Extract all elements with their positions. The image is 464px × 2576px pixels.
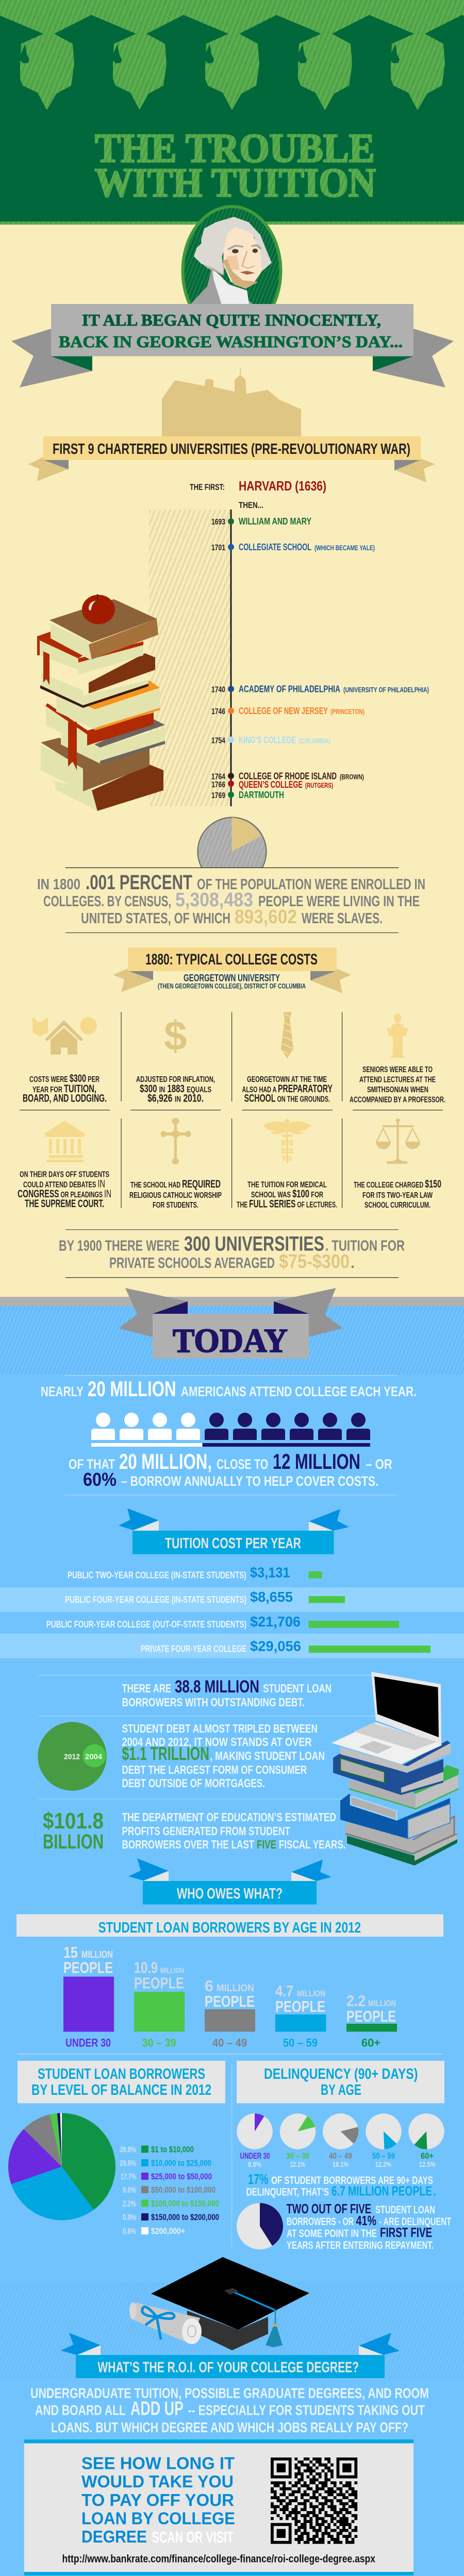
pie charts: delinquency by age: 16.1% (333, 2160, 349, 2169)
text block: 12 million borrow (64, 1449, 397, 1495)
bar under 30: 15 (63, 1943, 78, 1961)
text block: 1900 universities: $75-$300 (279, 1251, 350, 1273)
text: medical school tuition: THE FULL SERIES OF LECTURES. (237, 1198, 337, 1210)
text: adjusted for inflation (136, 1075, 215, 1105)
timeline entry 1769: 1769 (211, 791, 225, 800)
text block: 12 million borrow: CLOSE TO (217, 1456, 268, 1472)
timeline entry 1740: 1740 (211, 685, 225, 694)
text block: 1800 population statistic: IN 1800 (37, 876, 80, 893)
text block: 1900 universities: . (351, 1255, 355, 1272)
text: seniors attended lectures: SMITHSONIAN WHEN (367, 1086, 428, 1094)
timeline entry 1740: ACADEMY OF PHILADELPHIA (239, 684, 340, 694)
timeline entry 1693: WILLIAM AND MARY (239, 516, 311, 527)
heading: balance panel: STUDENT LOAN BORROWERS (38, 2066, 205, 2082)
heading: delinquency panel (237, 2061, 444, 2103)
text block: 1800 population statistic: .001 PERCENT (86, 871, 192, 894)
bar chart: tuition cost per year: PUBLIC TWO-YEAR COLLEGE (IN-STATE STUDENTS) (68, 1570, 246, 1581)
text: adjusted for inflation: $6,926 IN 2010. (147, 1093, 204, 1105)
banner: who owes what: WHO OWES WHAT? (177, 1886, 283, 1902)
banner: roi of your college degree: WHAT’S THE R.O.I. OF YOUR COLLEGE DEGREE? (97, 2360, 359, 2376)
legend: balance levels: 0.6% (123, 2227, 136, 2236)
bar 30-39: 30 – 39 (142, 2037, 176, 2049)
chart: timeline of universities (149, 510, 429, 806)
chart: debt growth circles 2012 vs 2004: 2012 (64, 1753, 80, 1761)
bar under 30 (63, 1943, 114, 2049)
bar 60+: MILLION (368, 1998, 396, 2008)
text block: 17 percent delinquent: 6.7 MILLION PEOPLE (332, 2183, 432, 2199)
bar 40-49: 40 – 49 (212, 2037, 247, 2049)
heading: the first harvard: HARVARD (1636) (239, 478, 326, 494)
timeline entry 1766: 1766 (211, 781, 225, 789)
bar chart: tuition cost per year: PUBLIC FOUR-YEAR COLLEGE (OUT-OF-STATE STUDENTS) (46, 1619, 246, 1630)
text block: 1900 universities: PRIVATE SCHOOLS AVERAGED (109, 1255, 275, 1272)
bar 40-49 (205, 1977, 255, 2049)
title: THE TROUBLE (95, 126, 375, 171)
legend: balance levels (120, 2144, 219, 2236)
bar 50-59 (275, 1982, 326, 2049)
pie charts: delinquency by age (237, 2113, 444, 2169)
text: debates in congress: ON THEIR DAYS OFF STUDENTS (20, 1171, 109, 1179)
bar under 30: MILLION (81, 1950, 113, 1960)
banner: 1880 typical college costs: 1880: TYPICAL COLLEGE COSTS (145, 951, 318, 968)
text block: student loan debt facts: STUDENT DEBT ALMOST TRIPLED BETWEEN (122, 1722, 318, 1735)
bar chart: tuition cost per year: PUBLIC FOUR-YEAR COLLEGE (IN-STATE STUDENTS) (65, 1595, 246, 1605)
banner: roi of your college degree (61, 2333, 400, 2378)
bar chart: borrowers by age (17, 1943, 443, 2248)
bar 50-59: PEOPLE (275, 1997, 325, 2015)
text block: 1900 universities: BY 1900 THERE WERE (59, 1238, 179, 1255)
text: costs were $300 (23, 1073, 107, 1105)
icon: house, book and apple (32, 1017, 97, 1055)
text: costs were $300: COSTS WERE $300 PER (29, 1073, 100, 1084)
text block: student loan debt facts: $1.1 TRILLION (122, 1743, 209, 1764)
icon: scales of justice (376, 1118, 420, 1164)
text block: nearly 20 million: 20 MILLION (88, 1377, 176, 1401)
text block: student loan debt facts (39, 1675, 379, 1851)
text block: 1800 population statistic: WERE SLAVES. (302, 910, 383, 927)
text block: 1900 universities: . TUITION FOR (325, 1238, 405, 1255)
chart: debt growth circles 2012 vs 2004: 2004 (85, 1753, 103, 1761)
text: medical school tuition: THE TUITION FOR MEDICAL (247, 1181, 327, 1189)
text block: student loan debt facts: THERE ARE (122, 1682, 171, 1695)
timeline entry 1701: COLLEGIATE SCHOOL (239, 542, 311, 552)
bar 60+ (346, 1992, 397, 2049)
text block: nearly 20 million (41, 1375, 417, 1401)
text block: student loan debt facts: STUDENT LOAN (263, 1682, 332, 1695)
title (95, 126, 376, 206)
pie charts: delinquency by age: 30 – 39 (286, 2151, 309, 2161)
bar 60+: 60+ (361, 2037, 380, 2049)
text block: two out of five (287, 2201, 451, 2251)
pie charts: delinquency by age: 60+ (421, 2151, 434, 2161)
timeline entry 1693: 1693 (211, 518, 225, 527)
legend: balance levels: 17.7% (121, 2173, 136, 2181)
text: debates in congress (18, 1171, 111, 1210)
panel: today section background (0, 1297, 464, 2576)
legend: balance levels: 39.9% (120, 2145, 136, 2155)
timeline entry 1701: (WHICH BECAME YALE) (314, 544, 375, 552)
bar 50-59: MILLION (297, 1989, 325, 1998)
panel: history section background (0, 225, 464, 1297)
panel: header background with graduate silhouettes (0, 0, 464, 225)
panel: 1880 facts grid (18, 1012, 445, 1210)
legend: balance levels: $200,000+ (151, 2226, 185, 2236)
timeline entry 1766: QUEEN’S COLLEGE (239, 779, 303, 790)
text block: 1800 population statistic: 5,308,483 (175, 889, 253, 911)
bar chart: tuition cost per year: $21,706 (250, 1614, 301, 1630)
callout: $101.8 billion (43, 1808, 104, 1853)
text: costs were $300: YEAR FOR TUITION, (32, 1083, 96, 1095)
text block: 1900 universities: 300 UNIVERSITIES (184, 1233, 324, 1256)
text: required religious worship: FOR STUDENTS. (153, 1201, 198, 1210)
bar 60+: PEOPLE (346, 2007, 396, 2025)
legend: balance levels: $100,000 to $150,000 (151, 2199, 219, 2208)
heading: balance panel: BY LEVEL OF BALANCE IN 2012 (31, 2082, 211, 2098)
icon: George Washington portrait (181, 205, 283, 304)
pie charts: delinquency by age: UNDER 30 (240, 2151, 270, 2161)
bar chart: tuition cost per year: $3,131 (250, 1564, 290, 1580)
text: required religious worship: RELIGIOUS CATHOLIC WORSHIP (129, 1191, 222, 1200)
pie charts: delinquency by age: 12.5% (419, 2160, 436, 2169)
text: see how long: LOAN BY COLLEGE (81, 2509, 235, 2528)
pie charts: delinquency by age: 8.9% (248, 2160, 261, 2169)
timeline entry 1746: COLLEGE OF NEW JERSEY (239, 706, 328, 716)
text: preparatory school: SCHOOL ON THE GROUNDS. (244, 1093, 330, 1105)
text block: student loan debt facts: THE DEPARTMENT OF EDUCATION’S ESTIMATED (122, 1810, 336, 1824)
text block: 1900 universities (59, 1229, 405, 1278)
text block: student loan debt facts: , MAKING STUDENT LOAN (210, 1749, 325, 1762)
legend: balance levels: 9.0% (123, 2186, 136, 2195)
text block: 17 percent delinquent (246, 2171, 436, 2199)
text: debates in congress: CONGRESS OR PLEADINGS IN (18, 1188, 111, 1200)
bar under 30: PEOPLE (63, 1959, 113, 1977)
pie charts: delinquency by age: 12.1% (290, 2160, 305, 2169)
text block: student loan debt facts: DEBT OUTSIDE OF MORTGAGES. (122, 1776, 265, 1790)
timeline entry 1769 (211, 790, 284, 800)
text: required religious worship: THE SCHOOL HAD REQUIRED (130, 1178, 221, 1190)
text: preparatory school: GEORGETOWN AT THE TIME (247, 1075, 327, 1084)
text block: student loan debt facts: DEBT THE LARGEST FORM OF CONSUMER (122, 1763, 307, 1776)
text block: two out of five: AT SOME POINT IN THE (287, 2228, 377, 2240)
banner: today: TODAY (173, 1322, 288, 1360)
timeline entry 1764: 1764 (211, 773, 225, 782)
text block: two out of five: STUDENT LOAN (375, 2204, 435, 2216)
text block: student loan debt facts: 2004 AND 2012, IT NOW STANDS AT OVER (122, 1735, 312, 1749)
bar 40-49: 6 (205, 1977, 213, 1995)
pie charts: delinquency by age: 50 – 59 (372, 2151, 395, 2161)
bar 60+: 2.2 (346, 1992, 366, 2010)
text: see how long (81, 2453, 235, 2546)
icon: QR code (271, 2459, 357, 2543)
bar 30-39 (134, 1959, 185, 2049)
text: law school curriculum: FOR ITS TWO-YEAR LAW (362, 1191, 433, 1200)
text: see how long: DEGREE (81, 2527, 147, 2546)
text: bankrate url: http://www.bankrate.com/finance/college-finance/roi-college-degree.aspx (62, 2553, 375, 2565)
title: WITH TUITION (95, 161, 376, 206)
banner: tuition cost per year: TUITION COST PER YEAR (165, 1535, 301, 1552)
text block: nearly 20 million: NEARLY (41, 1384, 84, 1399)
icon: laptop on stack of books (332, 1672, 459, 1866)
icon: graduation cap and diploma (129, 2257, 309, 2350)
text: see how long: SEE HOW LONG IT (81, 2453, 235, 2473)
text block: 12 million borrow: 60% (83, 1469, 117, 1490)
banner: it all began: IT ALL BEGAN QUITE INNOCENTLY, (82, 311, 381, 329)
banner: who owes what (128, 1858, 332, 1904)
text block: two out of five: 41% (356, 2213, 376, 2228)
bar 30-39: PEOPLE (134, 1974, 184, 1992)
heading: delinquency panel: DELINQUENCY (90+ DAYS) (264, 2066, 418, 2082)
text: required religious worship (129, 1178, 222, 1210)
text: preparatory school: ALSO HAD A PREPARATORY (242, 1083, 333, 1095)
banner: today (119, 1288, 343, 1360)
heading: student loan borrowers by age: STUDENT LOAN BORROWERS BY AGE IN 2012 (98, 1920, 361, 1936)
bar chart: tuition cost per year: $8,655 (250, 1589, 293, 1605)
text block: 17 percent delinquent: DELINQUENT, THAT’S (246, 2187, 329, 2198)
text: medical school tuition (237, 1181, 337, 1210)
text: see how long: TO PAY OFF YOUR (81, 2490, 234, 2510)
text block: student loan debt facts: 38.8 MILLION (175, 1677, 259, 1697)
heading: the first harvard (190, 478, 326, 510)
panel: loan payoff QR callout (24, 2439, 413, 2575)
timeline entry 1701 (211, 542, 375, 552)
text: preparatory school (242, 1075, 333, 1105)
callout: $101.8 billion: BILLION (43, 1831, 104, 1853)
bar 40-49: MILLION (217, 1983, 254, 1994)
bar 40-49: PEOPLE (205, 1992, 255, 2010)
text block: 12 million borrow: – BORROW ANNUALLY TO HELP COVER COSTS. (121, 1473, 378, 1489)
text block: student loan debt facts: BORROWERS WITH OUTSTANDING DEBT. (122, 1696, 305, 1709)
banner: 1880 typical college costs (113, 947, 351, 993)
text block: 12 million borrow: 12 MILLION (273, 1449, 360, 1473)
bar chart: tuition cost per year: $29,056 (250, 1638, 301, 1654)
chart: 1800 population pie (197, 817, 267, 868)
timeline entry 1693 (211, 516, 311, 527)
chart: debt growth circles 2012 vs 2004 (38, 1722, 107, 1791)
bar 50-59: 4.7 (275, 1982, 293, 2000)
legend: balance levels: 0.9% (123, 2213, 136, 2222)
text: debates in congress: THE SUPREME COURT. (25, 1198, 104, 1210)
timeline entry 1754: (COLUMBIA) (299, 737, 330, 745)
legend: balance levels: $50,000 to $100,000 (151, 2185, 216, 2195)
timeline entry 1754: KING’S COLLEGE (239, 735, 296, 745)
text block: undergraduate tuition add up: AND BOARD ALL (35, 2402, 126, 2418)
timeline entry 1754 (211, 735, 330, 745)
timeline entry 1701: 1701 (211, 544, 225, 552)
pie chart: borrowers by balance (8, 2113, 115, 2220)
text block: student loan debt facts: PROFITS GENERATED FROM STUDENT (122, 1824, 290, 1838)
text: debates in congress: COULD ATTEND DEBATES IN (23, 1178, 105, 1190)
text block: 12 million borrow: 20 MILLION, (119, 1449, 212, 1473)
timeline entry 1746: 1746 (211, 707, 225, 716)
icon: necktie (281, 1012, 293, 1058)
text block: 1800 population statistic (37, 868, 425, 933)
timeline entry 1740 (211, 684, 429, 694)
heading: the first harvard: THEN... (239, 500, 263, 510)
icon: stack of books with apple (37, 594, 165, 811)
bar 50-59: 50 – 59 (283, 2037, 318, 2049)
timeline entry 1740: (UNIVERSITY OF PHILADELPHIA) (343, 685, 429, 693)
text block: 17 percent delinquent: . (433, 2187, 436, 2198)
heading: student loan borrowers by age (16, 1914, 443, 1937)
timeline entry 1754: 1754 (211, 737, 225, 745)
text: seniors attended lectures (350, 1065, 445, 1105)
text: law school curriculum (354, 1178, 441, 1210)
timeline entry 1764: (BROWN) (340, 773, 364, 781)
banner: it all began: BACK IN GEORGE WASHINGTON’S DAY... (59, 332, 403, 351)
text block: 1800 population statistic: UNITED STATES, OF WHICH (81, 910, 230, 927)
legend: balance levels: 2.2% (123, 2200, 136, 2208)
banner: tuition cost per year (119, 1509, 349, 1554)
legend: balance levels: $10,000 to $25,000 (151, 2158, 211, 2168)
banner: first 9 chartered universities (28, 436, 435, 482)
text block: undergraduate tuition add up: ADD UP (130, 2398, 184, 2420)
text block: 12 million borrow: – OR (366, 1456, 392, 1472)
text block: two out of five: BORROWERS - OR (287, 2216, 354, 2228)
text block: two out of five: FIRST FIVE (380, 2225, 432, 2240)
icon: cross (161, 1118, 191, 1164)
text block: two out of five: TWO OUT OF FIVE (287, 2201, 371, 2216)
text block: 12 million borrow: OF THAT (69, 1456, 115, 1472)
icon: capitol building (45, 1121, 85, 1162)
text block: 1800 population statistic: 893,602 (235, 906, 297, 928)
heading: delinquency panel: BY AGE (321, 2082, 361, 2098)
chart: two out of five pie (237, 2203, 283, 2249)
legend: balance levels: $1 to $10,000 (151, 2144, 194, 2155)
legend: balance levels: $25,000 to $50,000 (151, 2172, 212, 2181)
text: law school curriculum: SCHOOL CURRICULUM. (364, 1201, 430, 1210)
timeline entry 1764: COLLEGE OF RHODE ISLAND (239, 771, 337, 782)
text: adjusted for inflation: ADJUSTED FOR INFLATION, (136, 1075, 215, 1084)
text block: student loan debt facts: BORROWERS OVER THE LAST FIVE FISCAL YEARS. (122, 1838, 345, 1851)
icon: caduceus (263, 1118, 311, 1163)
bar 30-39: MILLION (160, 1967, 184, 1975)
legend: balance levels: 29.8% (120, 2159, 136, 2168)
pie charts: delinquency by age: 40 – 49 (329, 2151, 352, 2161)
text: see how long: SCAN OR VISIT (152, 2528, 234, 2546)
heading: balance panel (18, 2061, 225, 2103)
banner: 1880 typical college costs: GEORGETOWN UNIVERSITY (184, 973, 280, 984)
legend: balance levels: $150,000 to $200,000 (151, 2212, 219, 2222)
text block: 17 percent delinquent: 17% (248, 2171, 269, 2187)
timeline entry 1746: (PRINCETON) (330, 707, 364, 716)
banner: it all began (11, 304, 454, 387)
pie charts: delinquency by age: 12.2% (375, 2160, 391, 2169)
bar under 30: UNDER 30 (65, 2037, 111, 2049)
timeline entry 1766: (RUTGERS) (305, 781, 333, 789)
bar 30-39: 10.9 (134, 1959, 158, 1977)
icon: lectern speaker (387, 1013, 408, 1058)
text block: undergraduate tuition add up (30, 2385, 429, 2435)
text: law school curriculum: THE COLLEGE CHARGED $150 (354, 1178, 441, 1190)
heading: the first harvard: THE FIRST: (190, 482, 225, 492)
banner: 1880 typical college costs: (THEN GEORGETOWN COLLEGE), DISTRICT OF COLUMBIA (158, 982, 306, 990)
timeline entry 1769: DARTMOUTH (239, 790, 284, 800)
text: adjusted for inflation: $300 IN 1883 EQUALS (140, 1083, 211, 1095)
text: seniors attended lectures: SENIORS WERE ABLE TO (362, 1065, 433, 1074)
icon: dollar sign: $ (164, 1013, 187, 1059)
callout: $101.8 billion: $101.8 (43, 1808, 104, 1834)
chart: people pictogram 60 percent (91, 1413, 370, 1447)
text: costs were $300: BOARD, AND LODGING. (23, 1093, 107, 1105)
text: medical school tuition: SCHOOL WAS $100 FOR (251, 1188, 323, 1200)
icon: college building silhouette (162, 368, 301, 437)
text: see how long: WOULD TAKE YOU (81, 2472, 234, 2491)
text block: 1800 population statistic: COLLEGES. BY CENSUS, (43, 893, 171, 910)
bar chart: tuition cost per year: PRIVATE FOUR-YEAR COLLEGE (141, 1644, 246, 1654)
bar chart: tuition cost per year (0, 1564, 464, 1658)
